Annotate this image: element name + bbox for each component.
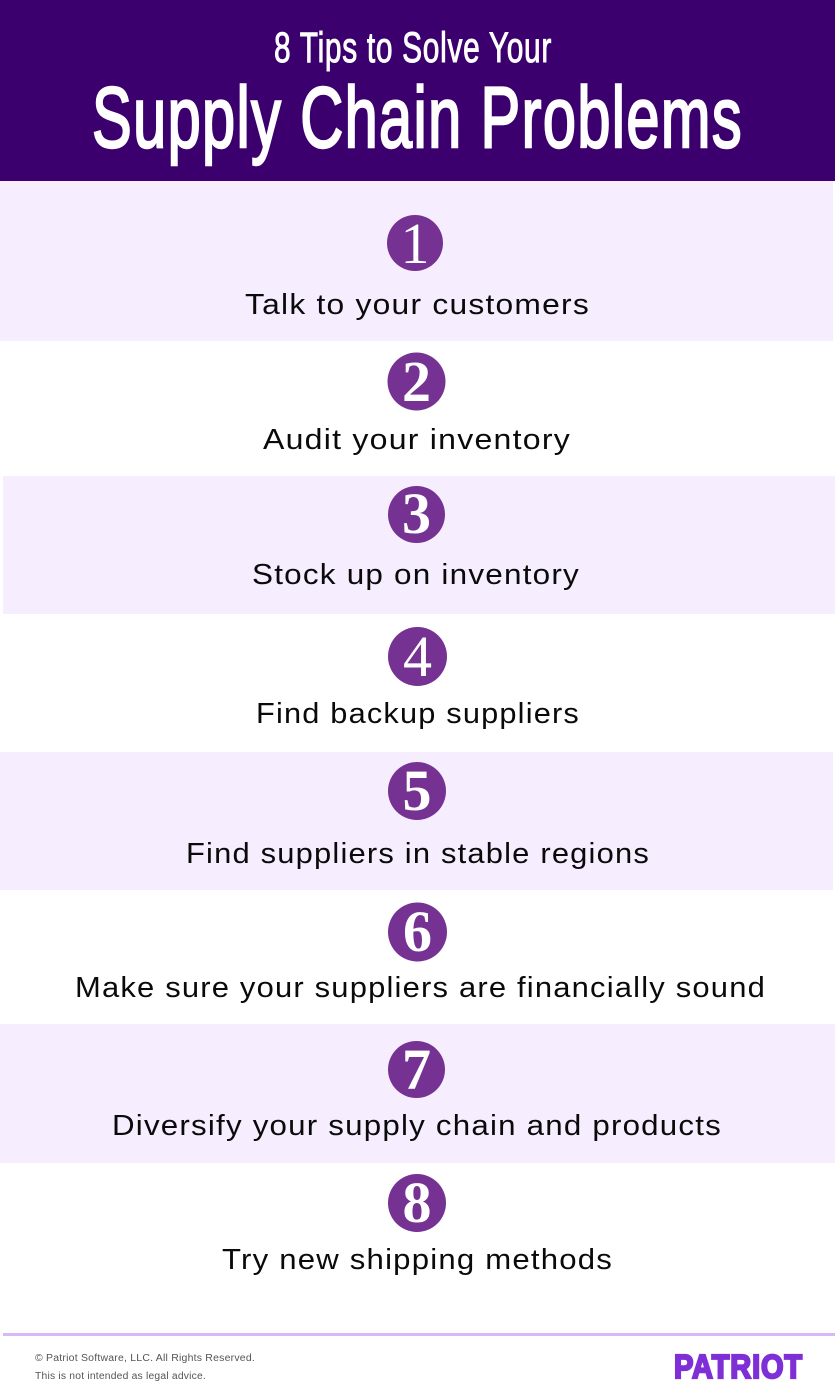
icon: number 5: 5 [402, 758, 432, 823]
tip 7 text: Diversify your supply chain and products [112, 1110, 722, 1142]
panel: tip 7 [0, 1024, 835, 1163]
panel: tip 6 [75, 899, 766, 1004]
tip 4 text: Find backup suppliers [256, 698, 580, 730]
footer legal text: © Patriot Software, LLC. All Rights Reserved. [35, 1353, 255, 1364]
icon: number 7: 7 [402, 1037, 431, 1102]
panel: tip 4 [256, 624, 580, 730]
icon: number 2: 2 [402, 349, 431, 414]
panel: tip 2 [263, 349, 571, 456]
icon: number 8 [388, 1170, 446, 1235]
icon: number 3: 3 [402, 481, 431, 546]
icon: number 5 [388, 758, 446, 823]
panel: tip 1 [0, 181, 833, 341]
icon: number 4: 4 [403, 624, 432, 689]
tip 5 text: Find suppliers in stable regions [186, 838, 650, 870]
tip 2 text: Audit your inventory [263, 424, 571, 456]
tip 8 text: Try new shipping methods [222, 1244, 613, 1276]
footer legal text [35, 1353, 255, 1382]
icon: number 3 [388, 481, 445, 546]
footer legal text: This is not intended as legal advice. [35, 1371, 206, 1382]
panel: tip 3 [3, 476, 835, 614]
tip 1 text: Talk to your customers [245, 289, 590, 321]
panel: tip 5 [0, 752, 833, 890]
header banner [0, 0, 835, 181]
icon: number 6: 6 [403, 899, 432, 964]
icon: number 1 [387, 211, 443, 276]
icon: number 1: 1 [400, 211, 430, 276]
logo: Patriot: PATRIOT [674, 1348, 803, 1385]
tip 6 text: Make sure your suppliers are financially sound [75, 972, 766, 1004]
icon: number 4 [388, 624, 447, 689]
icon: number 6 [388, 899, 447, 964]
subtitle: 8 Tips to Solve Your [274, 24, 552, 72]
icon: number 8: 8 [402, 1170, 432, 1235]
icon: number 2 [388, 349, 446, 414]
icon: number 7 [388, 1037, 445, 1102]
panel: tip 8 [222, 1170, 613, 1276]
tip 3 text: Stock up on inventory [252, 559, 580, 591]
